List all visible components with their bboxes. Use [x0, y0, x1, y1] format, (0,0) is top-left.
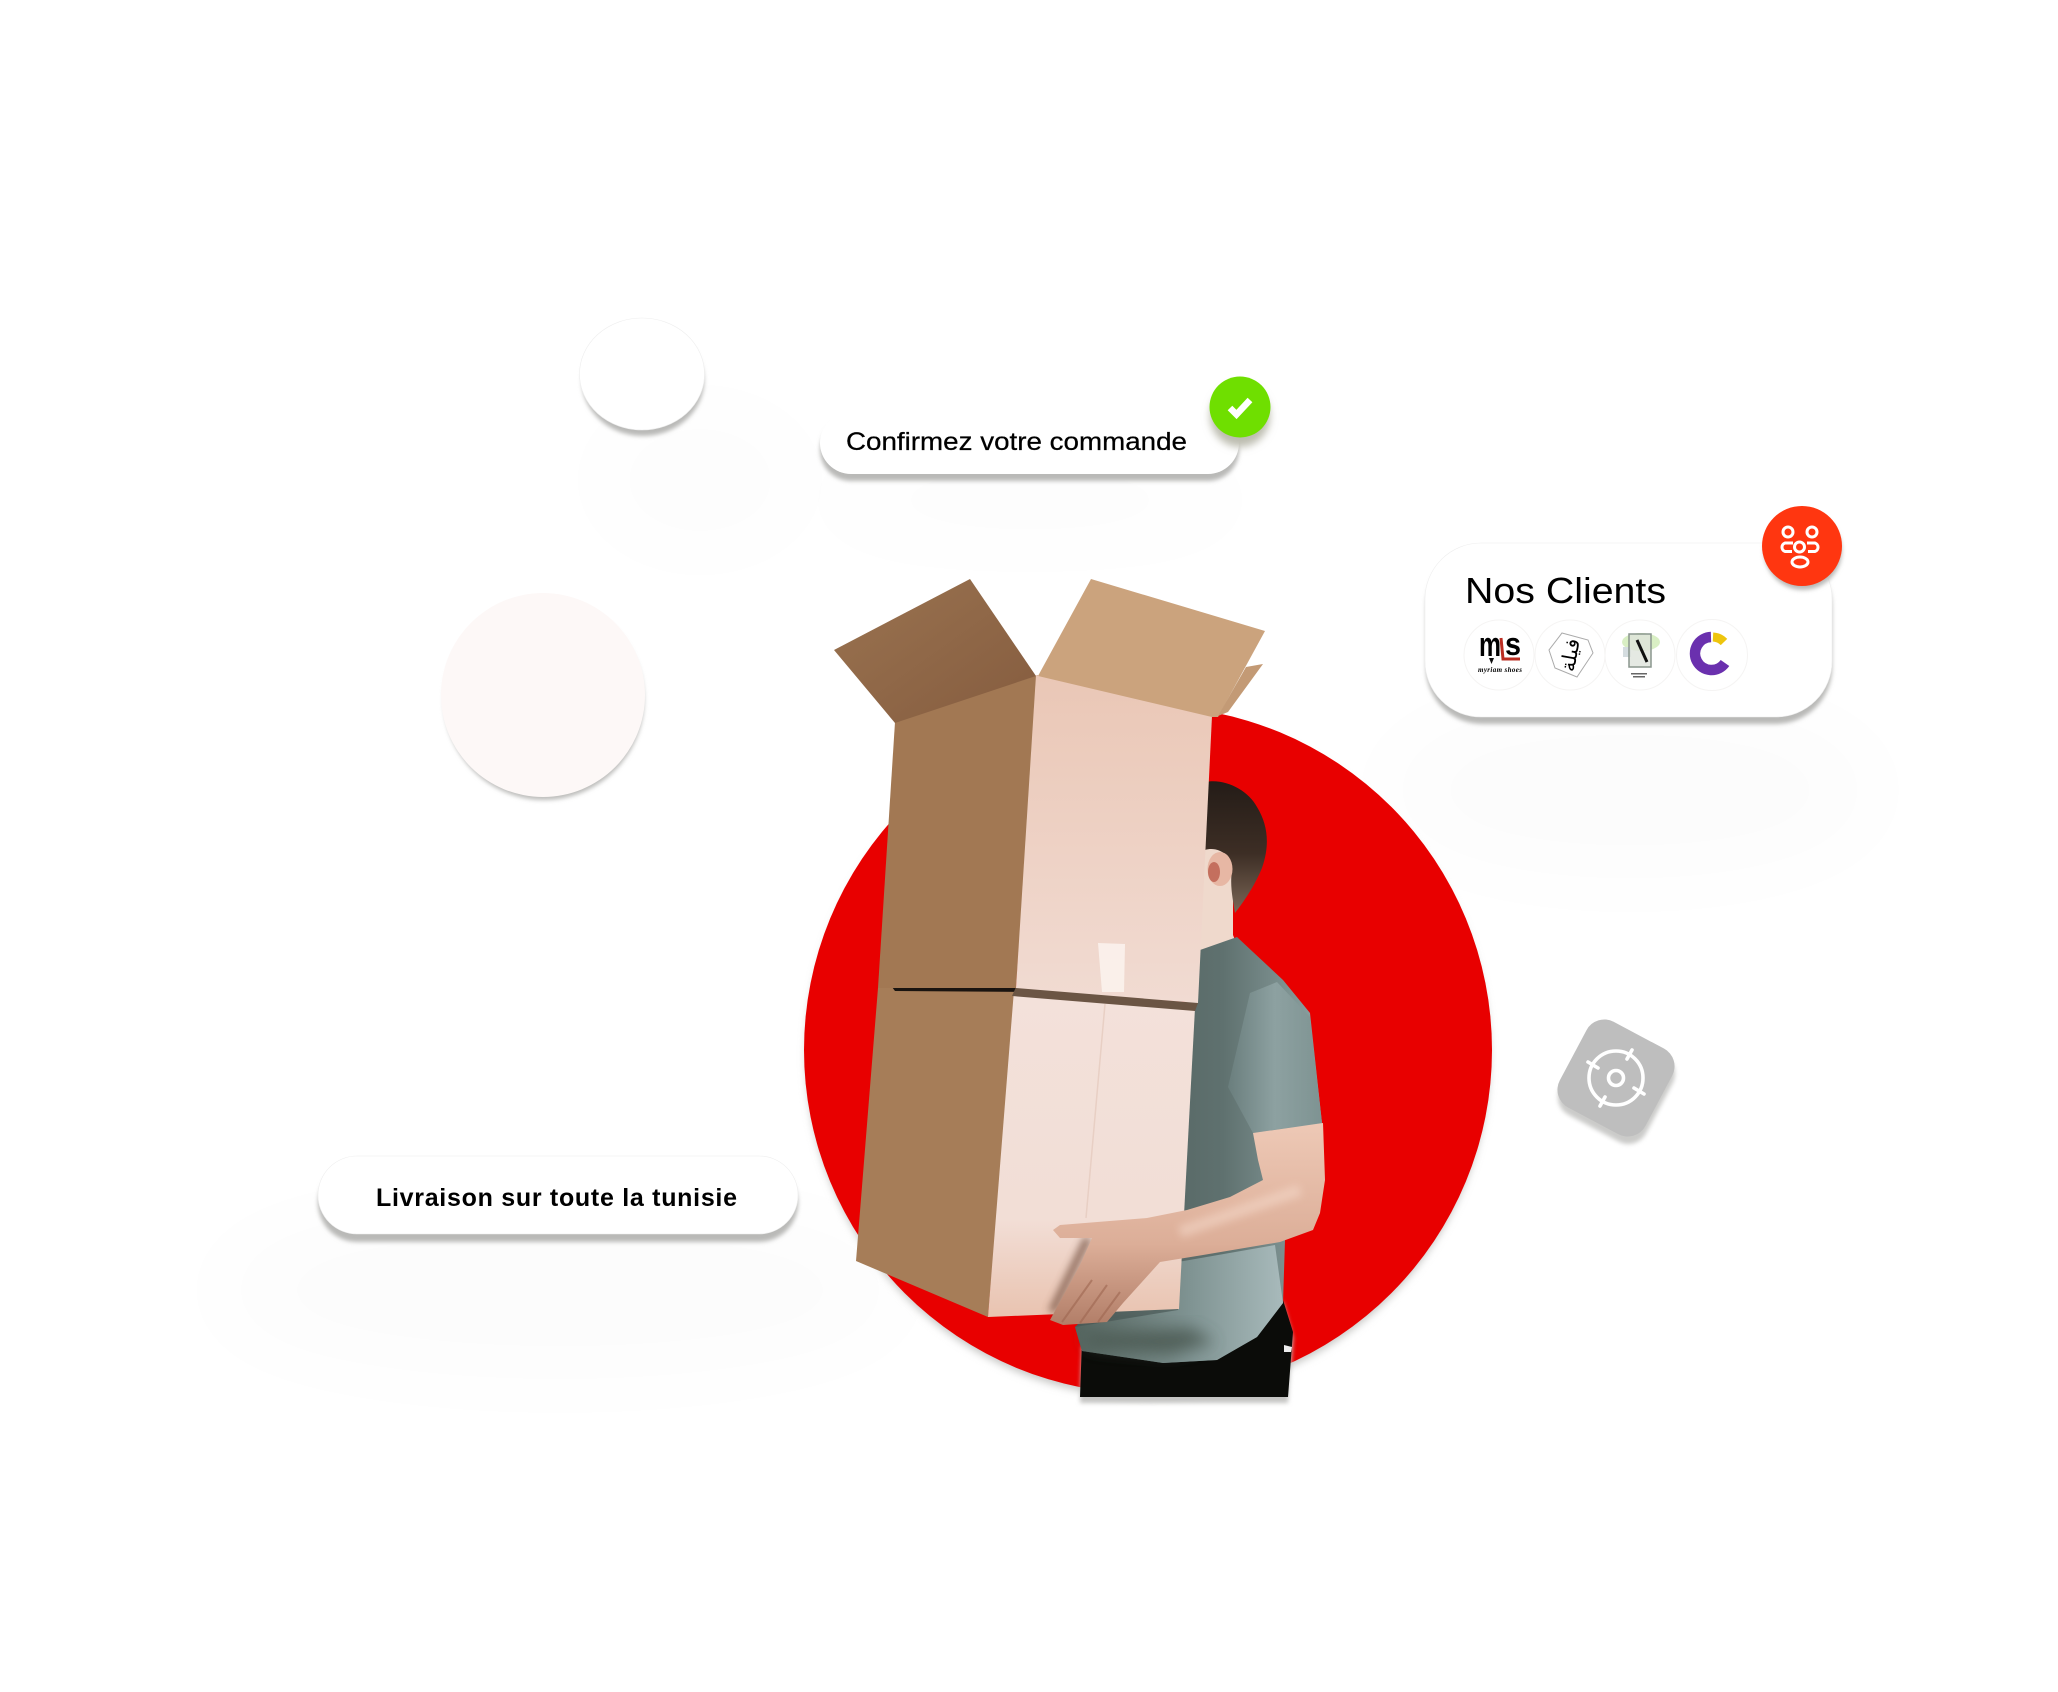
t-shirt: [1075, 937, 1322, 1363]
card title: Nos Clients: [1465, 570, 1666, 611]
arm and hand: [1050, 1123, 1325, 1325]
icon: red clients badge: [1762, 506, 1842, 590]
logo: arabic calligraphy: [1535, 620, 1605, 690]
logo: myriam shoes: myriam shoes: [1478, 666, 1522, 674]
client logos: [1464, 620, 1748, 690]
decorative white circle: [580, 318, 704, 436]
delivery text: Livraison sur toute la tunisie: [376, 1184, 737, 1212]
box flaps: [834, 579, 1265, 723]
logo: myriam shoes: m: [1479, 626, 1501, 664]
logo: green sketch frame: [1605, 620, 1675, 690]
icon: grey target diamond: [1550, 1012, 1682, 1151]
stacked cardboard boxes: [834, 579, 1265, 1317]
logo: myriam shoes: [1464, 620, 1534, 690]
delivery pill: [318, 1156, 798, 1242]
soft background shadows: [200, 400, 1890, 1380]
decorative pale pink circle: [441, 593, 645, 800]
gap between boxes: [892, 987, 1198, 1011]
icon: green check badge: [1210, 376, 1270, 447]
logo: purple and yellow C: [1676, 620, 1748, 690]
neck and head: [1195, 781, 1267, 960]
confirmation pill: [820, 376, 1270, 481]
logo: arabic calligraphy: فيلة: [1555, 637, 1585, 673]
pants: [1080, 1300, 1293, 1403]
tape: [1098, 943, 1125, 992]
logo: myriam shoes: s: [1505, 626, 1521, 662]
lower box: [856, 988, 1195, 1317]
upper box: [878, 675, 1212, 1003]
clients card: [1425, 506, 1842, 724]
red background circle: [804, 706, 1492, 1398]
delivery man: [1075, 781, 1322, 1403]
confirmation text: Confirmez votre commande: [846, 428, 1187, 456]
